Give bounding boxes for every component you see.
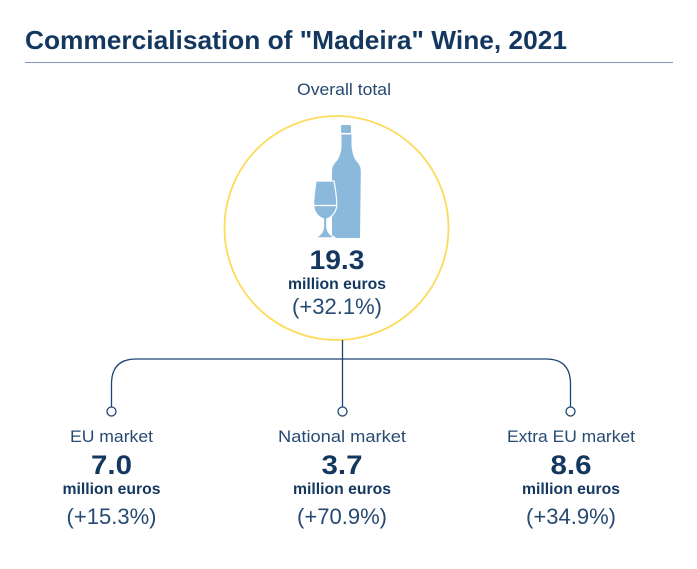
- connector tree: [107, 340, 575, 416]
- overall total label: Overall total: [297, 80, 391, 99]
- panel: National market: million euros: [293, 481, 391, 498]
- panel: National market: [278, 427, 406, 529]
- panel: Extra EU market: 8.6: [550, 450, 592, 480]
- panel: Extra EU market: Extra EU market: [507, 427, 635, 446]
- panel: EU market: EU market: [70, 427, 153, 446]
- panel: EU market: (+15.3%): [66, 504, 156, 529]
- icon: wine bottle and glass: [314, 125, 361, 238]
- panel: Extra EU market: (+34.9%): [526, 504, 616, 529]
- panel: Extra EU market: [507, 427, 635, 529]
- panel: EU market: million euros: [62, 481, 160, 498]
- total change: (+32.1%): [292, 294, 382, 319]
- panel: EU market: [62, 427, 160, 529]
- panel: Extra EU market: million euros: [522, 481, 620, 498]
- panel: EU market: 7.0: [91, 450, 132, 480]
- panel: overall total circle: [224, 116, 448, 340]
- panel: National market: National market: [278, 427, 406, 446]
- panel: National market: 3.7: [322, 450, 362, 480]
- total value: 19.3: [310, 245, 364, 275]
- panel: National market: (+70.9%): [297, 504, 387, 529]
- title: Commercialisation of "Madeira" Wine, 2021: [25, 25, 567, 55]
- total unit: million euros: [288, 276, 386, 293]
